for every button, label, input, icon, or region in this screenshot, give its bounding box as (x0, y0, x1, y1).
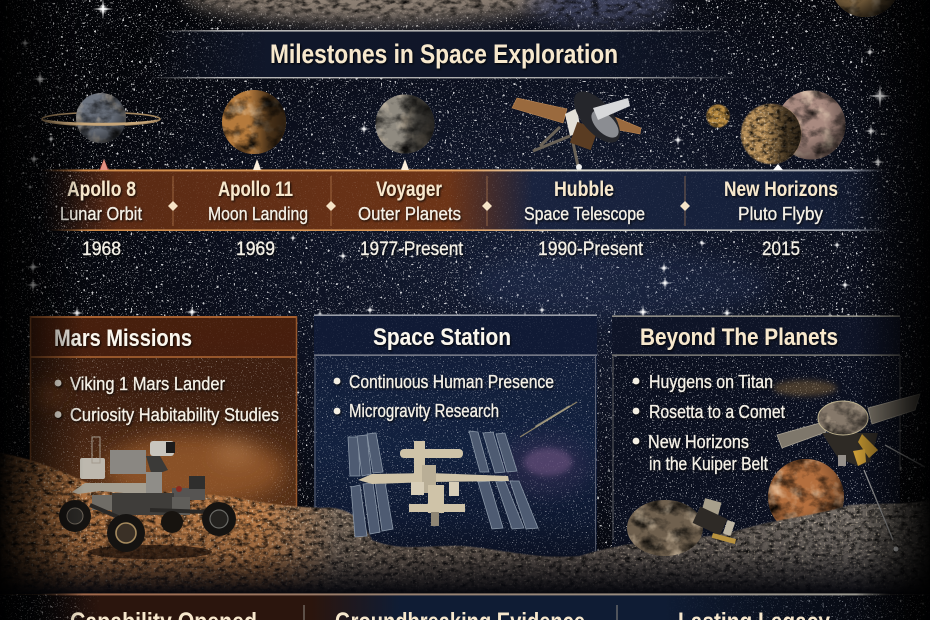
panel bullet list (334, 372, 554, 421)
timeline years: 1990-Present (538, 239, 644, 260)
solar arrays (348, 431, 538, 537)
milestone: New Horizons (724, 178, 838, 224)
panel bullet list (55, 374, 279, 425)
icon: Pluto pink planet (776, 90, 846, 160)
milestone: Hubble: Space Telescope (524, 204, 645, 224)
title banner (150, 30, 740, 78)
icon: orange planet (768, 459, 844, 535)
panel bullet list: Rosetta to a Comet (649, 402, 785, 422)
timeline dividers (173, 176, 685, 226)
panel dust cloud (773, 380, 837, 396)
panel: Mars Missions (30, 316, 297, 517)
panel bullet list: Viking 1 Mars Lander (70, 374, 225, 394)
timeline years: 1969 (236, 239, 275, 260)
panel heading: Beyond The Planets (640, 324, 838, 351)
panel bullet list: Continuous Human Presence (349, 372, 554, 392)
top lunar surface and nebula strip (185, 0, 672, 24)
icon: Voyager grey planet (376, 94, 434, 154)
panel: Space Station (314, 314, 597, 580)
bottom summary band (30, 593, 910, 620)
icon: partial planet top right (830, 0, 900, 17)
icon: Apollo 11 orange moon (222, 90, 286, 154)
icon: Mars rover (59, 437, 236, 559)
icon: Hubble spacecraft (512, 84, 641, 170)
icon: International Space Station (348, 431, 538, 537)
icon: comet streak (520, 402, 577, 437)
icon: comet rock with lander (627, 498, 736, 556)
timeline years (82, 239, 800, 260)
panel bullet list (633, 372, 785, 474)
milestone: Apollo 8: Lunar Orbit (60, 204, 142, 224)
milestone: Apollo 8: Apollo 8 (67, 178, 136, 201)
panel: Beyond The Planets (612, 315, 900, 576)
terrain: planetary surface across panels (0, 453, 930, 594)
panel bullet list: Curiosity Habitability Studies (70, 405, 279, 425)
icon: probe spacecraft (777, 394, 925, 552)
timeline band (40, 159, 890, 231)
station truss and modules (358, 441, 509, 526)
timeline planets and spacecraft (42, 84, 846, 170)
panel bullet list: Microgravity Research (349, 401, 499, 421)
milestone: New Horizons: New Horizons (724, 178, 838, 201)
icon: small asteroid (706, 104, 730, 128)
milestone: Apollo 11: Apollo 11 (218, 178, 293, 201)
milestone: Apollo 11 (208, 178, 308, 224)
icon: Apollo 8 ringed moon (42, 93, 160, 143)
panel nebula (501, 435, 589, 495)
panel heading: Mars Missions (54, 325, 192, 352)
icon: large rocky body (741, 104, 801, 164)
timeline years: 1977-Present (360, 239, 464, 260)
timeline years: 1968 (82, 239, 121, 260)
milestone: Voyager: Outer Planets (358, 204, 461, 224)
timeline markers (99, 159, 783, 170)
panel heading: Space Station (373, 324, 511, 351)
milestone: Voyager: Voyager (376, 178, 442, 201)
panel nebula glow (32, 385, 285, 506)
panel bullet list: Huygens on Titan (649, 372, 773, 392)
milestone: Hubble: Hubble (554, 178, 614, 201)
milestone: Voyager (358, 178, 461, 224)
title: Milestones in Space Exploration (270, 39, 618, 69)
divider diamonds (168, 201, 690, 211)
milestone: New Horizons: Pluto Flyby (738, 204, 823, 224)
milestone: Hubble (524, 178, 645, 224)
milestone: Apollo 8 (60, 178, 142, 224)
timeline years: 2015 (762, 239, 800, 260)
panel bullet list: New Horizons (648, 432, 749, 452)
panel bullet list: in the Kuiper Belt (649, 454, 768, 474)
milestone: Apollo 11: Moon Landing (208, 204, 308, 224)
rover wheels (59, 500, 236, 552)
